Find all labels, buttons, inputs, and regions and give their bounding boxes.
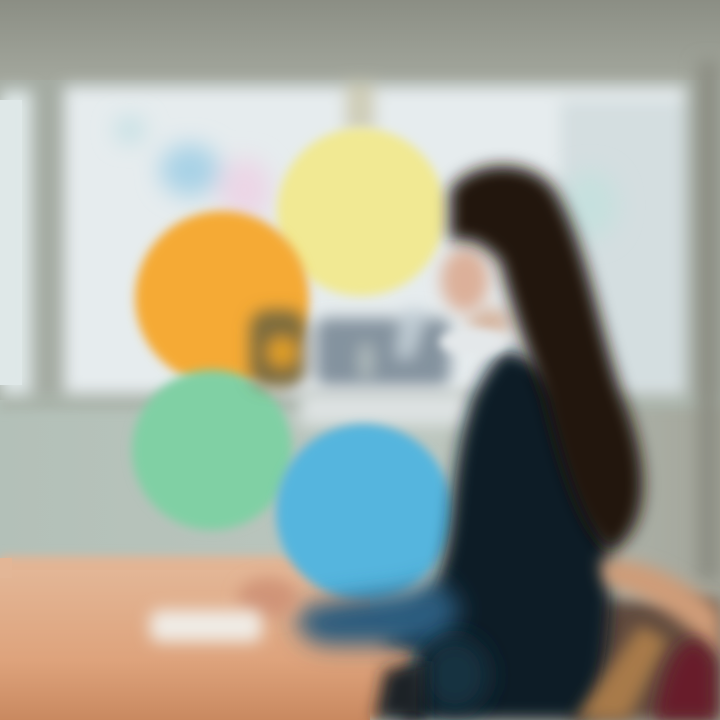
person: [238, 166, 720, 720]
white collar: [439, 329, 507, 355]
circle: blue: [276, 424, 452, 600]
lower torso blue: [421, 637, 489, 713]
forearm and sleeve: [296, 580, 462, 645]
chair: [375, 560, 720, 720]
torso: [380, 350, 610, 720]
circle: yellow: [277, 128, 445, 296]
window panels: [0, 82, 686, 395]
paper on table: [150, 610, 262, 642]
circle: green: [132, 370, 292, 530]
table: [0, 556, 420, 720]
hair: [450, 166, 643, 552]
faint whiteboard sketches: [116, 118, 618, 239]
blurred central logo: [250, 310, 472, 426]
chair backdrop: [570, 600, 720, 720]
face: [441, 248, 489, 312]
neck skin: [468, 308, 512, 336]
circle: orange: [135, 211, 309, 385]
hand: [238, 578, 298, 618]
